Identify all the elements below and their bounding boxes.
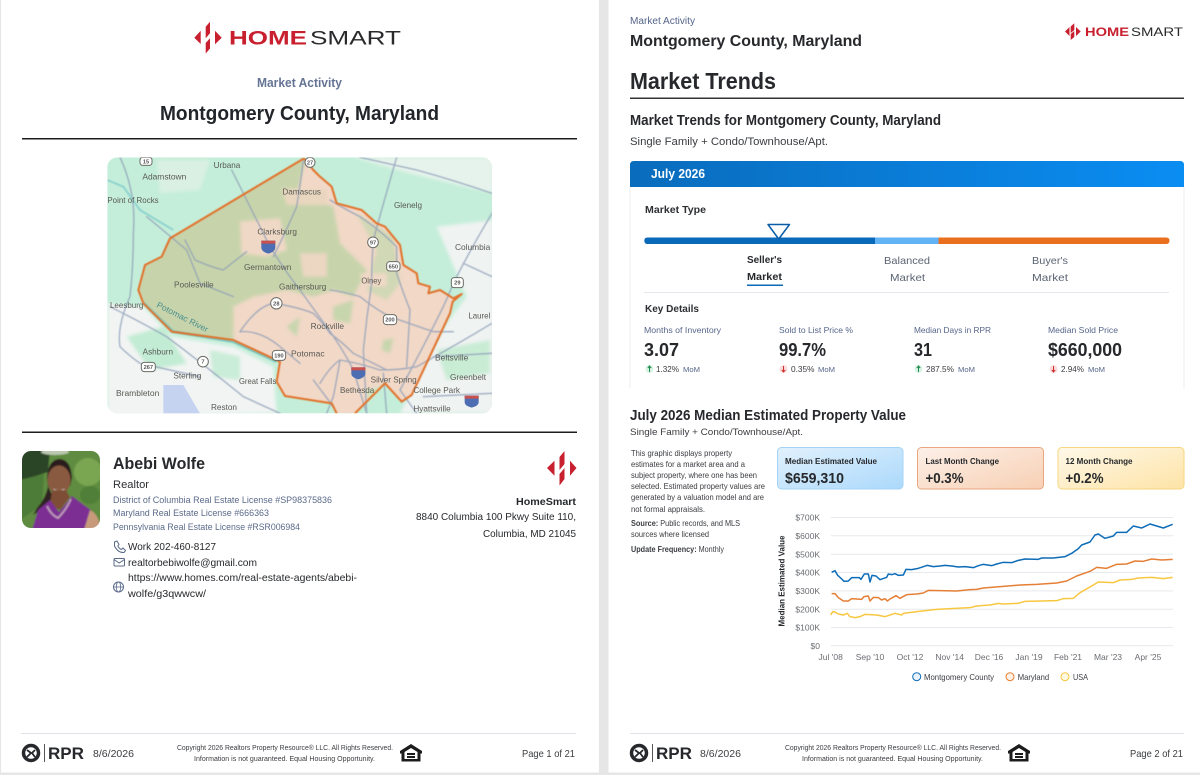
y axis labels: $200K <box>795 604 820 614</box>
map: Montgomery County: 29 <box>454 281 460 287</box>
map labels: Sterling <box>173 371 202 381</box>
text block: description: Update Frequency: Monthly <box>631 545 724 554</box>
x axis labels: Dec '16 <box>975 652 1004 662</box>
footer: page 2: 8/6/2026 <box>700 748 741 760</box>
page 2 running header: Market Activity <box>630 16 695 27</box>
metric: months of inventory: 3.07 <box>644 340 679 360</box>
map: Montgomery County: 200 <box>385 318 395 324</box>
map labels: Gaithersburg <box>279 281 327 291</box>
subheading: property types: Single Family + Condo/Townhouse/Apt. <box>630 427 803 438</box>
card: median estimated value: Median Estimated Value <box>785 456 877 466</box>
metric: months of inventory: Months of Inventory <box>644 325 722 335</box>
map labels: Rockville <box>311 321 344 331</box>
map: Montgomery County: 15 <box>143 160 149 166</box>
legend: Maryland <box>1018 672 1049 682</box>
agent: contact details: realtorbebiwolfe@gmail.com <box>128 557 257 569</box>
y axis labels <box>795 512 820 651</box>
metric: median days in RPR <box>914 325 991 374</box>
y axis labels: $100K <box>795 622 820 632</box>
text block: description: estimates for a market area and a <box>631 460 746 469</box>
photo: agent portrait <box>20 449 102 530</box>
map labels: Greenbelt <box>450 372 487 382</box>
map labels: Columbia <box>455 242 491 252</box>
y axis labels: $300K <box>795 586 820 596</box>
card: 12 month change: +0.2% <box>1066 471 1104 487</box>
text block: description: Source: Public records, and MLS <box>631 519 740 528</box>
footer: page 2: Information is not guaranteed. Equal Housing Opportunity. <box>802 756 983 763</box>
metric: sold to list price <box>779 325 853 374</box>
map labels: Beltsville <box>435 353 469 363</box>
brokerage address: HomeSmart <box>516 496 577 508</box>
map: Montgomery County: 28 <box>273 301 279 307</box>
y axis labels: $0 <box>811 641 820 651</box>
gauge labels: Buyer's <box>1032 255 1068 267</box>
gauge labels <box>747 254 1068 286</box>
gauge labels: Balanced <box>884 255 930 267</box>
county fill <box>139 160 454 414</box>
card header: July 2026 <box>651 167 705 181</box>
map labels: Great Falls <box>239 376 276 386</box>
agent: licenses <box>113 495 332 532</box>
logo: brokerage icon <box>547 451 576 486</box>
x axis labels: Oct '12 <box>897 652 924 662</box>
map labels: Adamstown <box>142 172 187 182</box>
map labels: Bethesda <box>340 385 375 395</box>
gauge labels: Market <box>890 272 925 284</box>
metric: sold to list price: MoM <box>818 365 835 374</box>
map: Montgomery County: 650 <box>389 264 398 270</box>
legend <box>913 672 1088 682</box>
card: last month change <box>918 448 1044 489</box>
card: 12 month change <box>1058 448 1184 489</box>
metric: median sold price: MoM <box>1088 365 1105 374</box>
logo: HomeSmart header <box>194 22 401 54</box>
metric: median days in RPR: Median Days in RPR <box>914 325 991 335</box>
agent: contact details <box>114 541 357 600</box>
map: Montgomery County <box>107 157 493 417</box>
card: last month change: +0.3% <box>926 471 964 487</box>
x axis labels: Sep '10 <box>856 652 885 662</box>
text block: description: not formal appraisals. <box>631 505 705 514</box>
footer: page 1: Information is not guaranteed. Equal Housing Opportunity. <box>194 756 375 763</box>
agent: licenses: Maryland Real Estate License #666363 <box>113 508 269 518</box>
data lines <box>831 524 1173 618</box>
map labels: Laurel <box>468 311 490 321</box>
map labels: Leesburg <box>110 300 144 310</box>
roads <box>110 157 492 413</box>
agent: name and role: Realtor <box>113 479 149 491</box>
map labels: Ashburn <box>143 346 173 356</box>
metric: median days in RPR: MoM <box>958 365 975 374</box>
map: Montgomery County: 27 <box>307 160 313 166</box>
logo: HomeSmart header: HOME <box>229 28 307 50</box>
metric: median days in RPR: 31 <box>914 340 932 360</box>
market type gauge <box>644 224 1170 244</box>
metric: median sold price: Median Sold Price <box>1048 325 1118 335</box>
heading: Market Trends: Market Trends <box>630 68 776 94</box>
metric: sold to list price: Sold to List Price % <box>779 325 853 335</box>
footer: page 2: Page 2 of 21 <box>1130 748 1183 760</box>
agent: contact details: https://www.homes.com/real-estate-agents/abebi- <box>128 572 357 584</box>
line chart: median estimated value <box>776 512 1173 682</box>
y axis labels: $400K <box>795 568 820 578</box>
agent: contact details: Work 202-460-8127 <box>128 541 216 553</box>
map: Montgomery County: 190 <box>274 353 284 359</box>
x axis labels: Jan '19 <box>1015 652 1043 662</box>
card: median estimated value <box>778 448 903 489</box>
text block: description <box>631 449 766 554</box>
route shields <box>140 157 463 372</box>
gauge labels: Seller's <box>747 254 782 266</box>
legend: Montgomery County <box>924 672 995 682</box>
y axis title: Median Estimated Value <box>776 535 786 626</box>
y axis labels: $700K <box>795 512 820 522</box>
x axis labels: Feb '21 <box>1054 652 1082 662</box>
footer: page 2 <box>632 744 1183 763</box>
map labels: Damascus <box>282 187 321 197</box>
metric: median days in RPR: 287.5% <box>926 364 954 374</box>
metric: months of inventory: MoM <box>683 365 700 374</box>
footer: page 2: RPR <box>656 744 692 763</box>
metric: months of inventory <box>644 325 722 374</box>
gauge labels: Market <box>1032 272 1068 284</box>
map: Montgomery County: Potomac River <box>155 300 210 334</box>
map: Montgomery County: 267 <box>144 365 153 371</box>
subtitle: Market Activity: Market Activity <box>257 76 342 90</box>
brokerage address <box>416 496 577 540</box>
map labels: Brambleton <box>116 388 160 398</box>
agent: name and role <box>113 455 205 491</box>
card: last month change: Last Month Change <box>926 456 999 466</box>
page 2 running header <box>630 16 862 50</box>
footer: page 2: Copyright 2026 Realtors Property Resource® LLC. All Rights Reserved. <box>785 744 1001 752</box>
card: 12 month change: 12 Month Change <box>1066 456 1133 466</box>
logo: HomeSmart small <box>1065 23 1183 40</box>
map labels <box>107 160 491 414</box>
x axis labels: Apr '25 <box>1135 652 1162 662</box>
map labels: Glenelg <box>394 200 422 210</box>
legend: USA <box>1073 672 1088 682</box>
agent: licenses: Pennsylvania Real Estate License #RSR006984 <box>113 522 300 532</box>
interstate shields <box>261 241 479 408</box>
panel: page 1 <box>1 0 599 772</box>
map labels: Silver Spring <box>371 375 417 385</box>
metric: median sold price: 2.94% <box>1061 364 1084 374</box>
logo: HomeSmart small: HOME <box>1085 27 1129 39</box>
card: median estimated value: $659,310 <box>785 471 844 487</box>
metric: months of inventory: 1.32% <box>656 364 679 374</box>
text block: description: selected. Estimated property values are <box>631 482 766 491</box>
text block: description: generated by a valuation model and are <box>631 493 765 502</box>
map labels: Clarksburg <box>257 227 297 237</box>
metric: sold to list price: 0.35% <box>791 364 815 374</box>
heading: median estimated value: July 2026 Median Estimated Property Value <box>630 408 906 424</box>
metric: median sold price: $660,000 <box>1048 340 1122 360</box>
subheading: property types: Single Family + Condo/Townhouse/Apt. <box>630 136 828 148</box>
agent: name and role: Abebi Wolfe <box>113 455 205 473</box>
county border <box>138 158 462 413</box>
map labels: Hyattsville <box>413 404 451 414</box>
title: county name: Montgomery County, Maryland <box>160 103 439 125</box>
footer: page 1: Page 1 of 21 <box>522 748 575 760</box>
text block: description: subject property, where one has been <box>631 471 757 480</box>
x axis labels: Jul '08 <box>819 652 843 662</box>
footer: page 1: RPR <box>48 744 84 763</box>
y axis labels: $500K <box>795 550 820 560</box>
footer: page 1 <box>24 744 575 763</box>
map labels: Poolesville <box>174 280 214 290</box>
card header <box>630 161 1184 187</box>
logo: HomeSmart small: SMART <box>1131 27 1183 39</box>
panel: page 2 <box>608 0 1200 772</box>
heading: Market Type: Market Type <box>645 204 706 216</box>
map labels: Point of Rocks <box>107 195 159 205</box>
logo: HomeSmart header: SMART <box>310 28 401 50</box>
brokerage address: 8840 Columbia 100 Pkwy Suite 110, <box>416 511 576 523</box>
agent: licenses: District of Columbia Real Estate License #SP98375836 <box>113 495 332 505</box>
metric: median sold price <box>1048 325 1122 374</box>
map labels: Potomac <box>291 349 325 359</box>
gauge labels: Market <box>747 271 783 283</box>
text block: description: sources where licensed <box>631 530 709 539</box>
heading: Market Trends for county: Market Trends for Montgomery County, Maryland <box>630 113 941 129</box>
heading: Key Details: Key Details <box>645 303 699 315</box>
map labels: Reston <box>211 402 237 412</box>
y axis labels: $600K <box>795 531 820 541</box>
text block: description: This graphic displays property <box>631 449 732 458</box>
map labels: College Park <box>413 385 461 395</box>
page 2 running header: Montgomery County, Maryland <box>630 33 862 50</box>
map labels: Germantown <box>244 262 292 272</box>
metric: sold to list price: 99.7% <box>779 340 826 360</box>
map: Montgomery County: 7 <box>201 360 205 366</box>
brokerage address: Columbia, MD 21045 <box>483 528 576 540</box>
map labels: Olney <box>361 275 382 285</box>
footer: page 1: 8/6/2026 <box>93 748 134 760</box>
footer: page 1: Copyright 2026 Realtors Property Resource® LLC. All Rights Reserved. <box>177 744 393 752</box>
x axis labels: Nov '14 <box>935 652 964 662</box>
map: Montgomery County: 97 <box>370 240 376 246</box>
x axis labels: Mar '23 <box>1094 652 1122 662</box>
agent: contact details: wolfe/g3qwwcw/ <box>127 588 206 600</box>
panel: July 2026 market card <box>630 161 1184 388</box>
x axis labels <box>819 652 1162 662</box>
map labels: Urbana <box>214 160 241 170</box>
